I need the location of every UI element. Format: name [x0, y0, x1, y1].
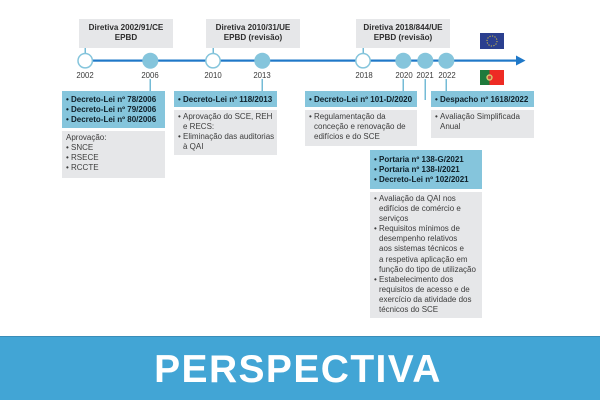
legislation 2006: Decreto-Lei nº 78/2006	[71, 95, 156, 104]
year 2022: 2022	[438, 71, 456, 80]
description 2021: Estabelecimento dos	[379, 275, 453, 284]
legislation 2013	[174, 91, 277, 107]
description 2022	[431, 110, 534, 138]
description 2021: função do tipo de utilização	[379, 265, 476, 274]
legislation 2022: Despacho nº 1618/2022	[440, 95, 528, 104]
description 2022: Anual	[440, 122, 460, 131]
year 2021: 2021	[416, 71, 434, 80]
description 2021: requisitos de acesso e de	[379, 285, 470, 294]
directive 2002: Diretiva 2002/91/CE	[89, 23, 163, 32]
description 2021: exercício da atividade dos	[379, 295, 472, 304]
directive 2002	[79, 19, 173, 48]
description 2022: Avaliação Simplificada	[440, 112, 520, 121]
description 2013: Eliminação das auditorias	[183, 132, 274, 141]
description 2006	[62, 131, 165, 178]
description 2006: RSECE	[71, 153, 99, 162]
description 2013: e RECS:	[183, 122, 214, 131]
description 2021: aos sistemas técnicos e	[379, 244, 464, 253]
description 2021: Avaliação da QAI nos	[379, 194, 456, 203]
directive 2002: EPBD	[115, 33, 137, 42]
year 2010: 2010	[204, 71, 222, 80]
legislation 2020: Decreto-Lei nº 101-D/2020	[314, 95, 412, 104]
description 2006: RCCTE	[71, 163, 99, 172]
legislation 2020	[305, 91, 417, 107]
banner: PERSPECTIVA	[0, 336, 600, 400]
icon: Portugal flag	[480, 70, 504, 85]
timeline axis with arrow	[77, 48, 526, 100]
directive 2010: Diretiva 2010/31/UE	[216, 23, 290, 32]
directive 2010	[206, 19, 300, 48]
description 2020: Regulamentação da	[314, 112, 386, 121]
directive 2018	[356, 19, 450, 48]
legislation 2021	[370, 150, 482, 189]
description 2021: a respetiva aplicação em	[379, 255, 468, 264]
legislation 2021: Portaria nº 138-I/2021	[379, 165, 460, 174]
legislation 2006: Decreto-Lei nº 79/2006	[71, 105, 156, 114]
year 2006: 2006	[141, 71, 159, 80]
directive 2010: EPBD (revisão)	[224, 33, 282, 42]
legislation 2013: Decreto-Lei nº 118/2013	[183, 95, 272, 104]
directive 2018: Diretiva 2018/844/UE	[363, 23, 443, 32]
icon: EU flag	[480, 33, 504, 49]
description 2020	[305, 110, 417, 146]
legislation 2006	[62, 91, 165, 128]
year 2002: 2002	[76, 71, 94, 80]
year 2018: 2018	[355, 71, 373, 80]
description 2021: técnicos do SCE	[379, 305, 438, 314]
description 2006: SNCE	[71, 143, 93, 152]
description 2021: serviços	[379, 214, 408, 223]
legislation 2022	[431, 91, 534, 107]
description 2013	[174, 110, 277, 155]
description 2021: Requisitos mínimos de	[379, 224, 460, 233]
description 2006: Aprovação:	[66, 133, 106, 142]
directive 2018: EPBD (revisão)	[374, 33, 432, 42]
legislation 2021: Portaria nº 138-G/2021	[379, 155, 464, 164]
description 2020: conceção e renovação de	[314, 122, 406, 131]
year 2020: 2020	[395, 71, 413, 80]
legislation 2021: Decreto-Lei nº 102/2021	[379, 175, 469, 184]
description 2021	[370, 192, 482, 318]
description 2020: edifícios e do SCE	[314, 132, 380, 141]
description 2021: desempenho relativos	[379, 234, 457, 243]
description 2013: Aprovação do SCE, REH	[183, 112, 272, 121]
description 2013: à QAI	[183, 142, 203, 151]
year 2013: 2013	[253, 71, 271, 80]
description 2021: edifícios de comércio e	[379, 204, 461, 213]
banner: PERSPECTIVA: PERSPECTIVA	[154, 348, 442, 391]
legislation 2006: Decreto-Lei nº 80/2006	[71, 115, 156, 124]
